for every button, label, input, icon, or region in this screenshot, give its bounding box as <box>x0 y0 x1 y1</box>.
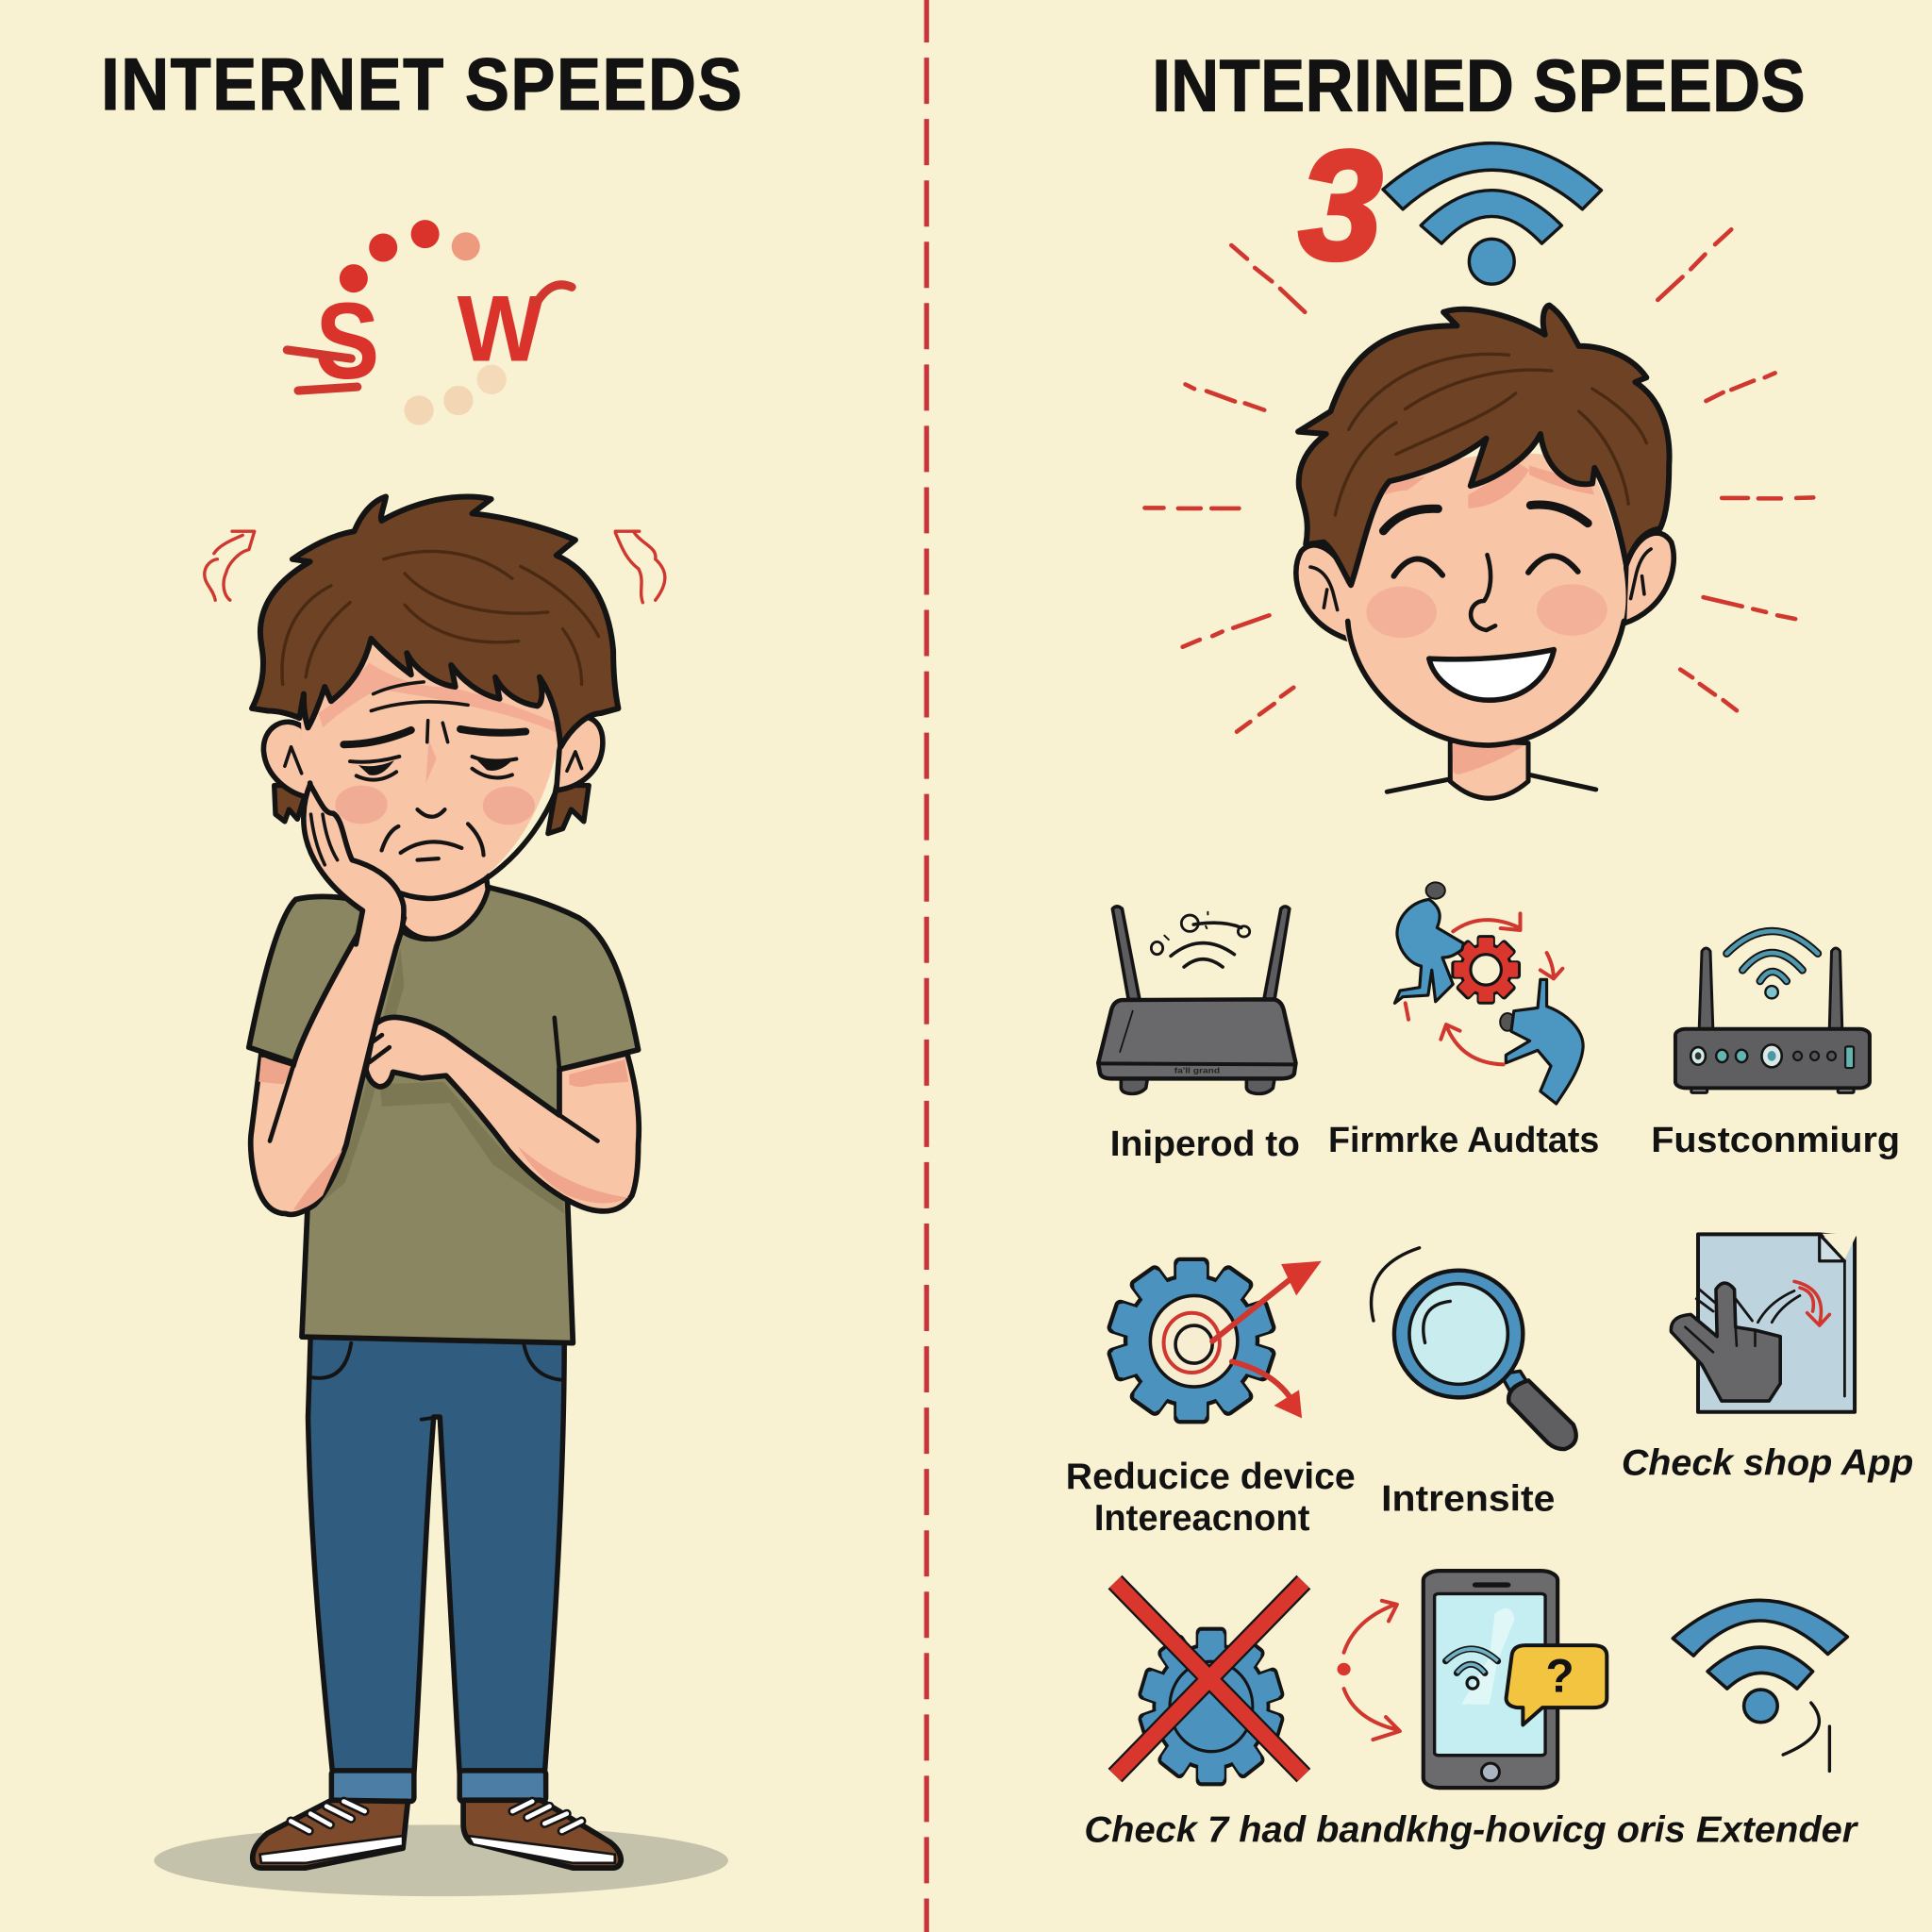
label: check bandwidth or extender: Check 7 had bandkhg-hovicg oris Extender <box>1084 1810 1859 1851</box>
label: firmware: Firmrke Audtats <box>1328 1121 1599 1160</box>
icon: people turning red gear <box>1394 882 1583 1104</box>
sad head <box>252 496 618 944</box>
label: reduce device interaction: Intereacnont <box>1094 1498 1309 1539</box>
hair <box>1298 306 1670 585</box>
icon: left stress squiggle <box>205 531 255 600</box>
eyebrows and eyes <box>1383 505 1588 531</box>
numeral 3 next to wifi: 3 <box>1299 118 1382 291</box>
icon: document with tapping hand <box>1671 1234 1856 1412</box>
label: check shop app: Check shop App <box>1622 1442 1913 1483</box>
label: reduce device interaction: Reducice device <box>1066 1457 1356 1497</box>
icon: router with antennas <box>1098 907 1296 1093</box>
label: reduce device interaction <box>1066 1457 1356 1539</box>
smile <box>1429 650 1554 700</box>
centre dashed divider <box>924 0 928 1932</box>
icon: magnifying glass <box>1372 1248 1576 1449</box>
icon: crossed-out gear <box>1115 1582 1304 1784</box>
icon: right stress squiggle <box>615 531 665 603</box>
label: intensity: Intrensite <box>1381 1478 1555 1519</box>
radiating joy lines <box>1144 229 1813 732</box>
icon: blue gear with red arrows <box>1108 1259 1322 1422</box>
neck <box>394 850 488 939</box>
title: right panel: INTERINED SPEEDS <box>1152 44 1806 126</box>
label: fast configuring: Fustconmiurg <box>1651 1121 1900 1160</box>
arm crossed at waist <box>366 1017 639 1211</box>
jeans <box>308 1337 564 1802</box>
label: router: Iniperod to <box>1110 1124 1300 1164</box>
figure: happy face with wifi <box>1296 306 1674 798</box>
tiny router print: fa'll grand <box>1174 1066 1220 1075</box>
face <box>1341 453 1626 745</box>
icon: wifi extender <box>1673 1600 1847 1771</box>
ears <box>1296 545 1349 640</box>
nose <box>1471 555 1495 630</box>
icon: slow loading spinner: S <box>315 281 379 402</box>
shoes <box>253 1800 621 1868</box>
title: left panel: INTERNET SPEEDS <box>101 43 742 125</box>
icon: wifi signal above happy face <box>1383 143 1601 284</box>
icon: phone with curved arrows and question bubble <box>1337 1571 1607 1788</box>
t-shirt <box>249 887 639 1343</box>
icon: slow loading spinner: W <box>458 277 543 382</box>
ground shadow <box>154 1824 728 1896</box>
icon: slow loading spinner <box>287 220 572 425</box>
figure: frustrated man <box>154 496 728 1896</box>
arm raised to cheek <box>251 918 404 1214</box>
icon: router with wifi waves <box>1675 931 1870 1092</box>
neck and shoulders <box>1387 741 1596 798</box>
icon: phone with curved arrows and question bubble: ? <box>1545 1649 1574 1702</box>
